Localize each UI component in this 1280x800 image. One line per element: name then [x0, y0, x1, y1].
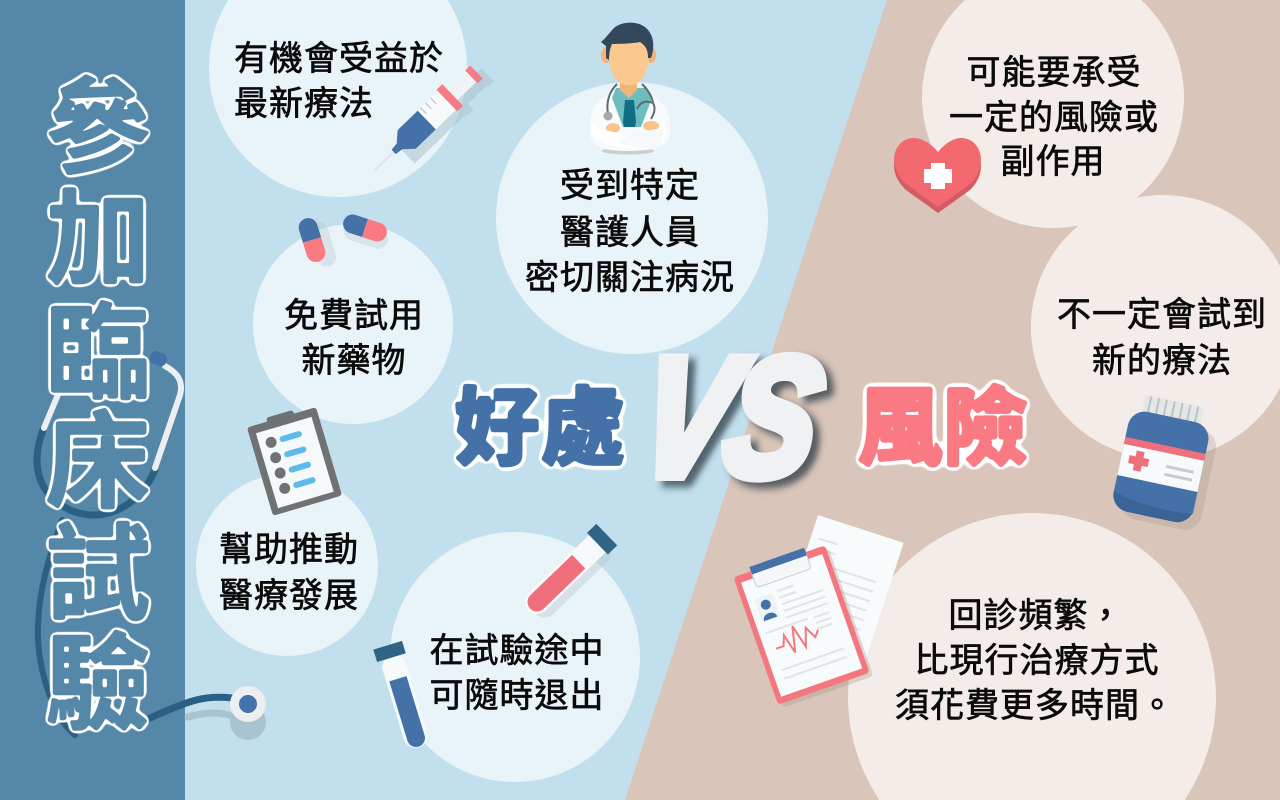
icon: medicine bottle: [1109, 393, 1224, 533]
title character 4: 床: [45, 405, 151, 522]
panel: risk 3: [848, 513, 1216, 800]
icon: medical report: [732, 515, 904, 709]
benefit 5 text: 可隨時退出: [430, 677, 604, 715]
heading: VS: [628, 324, 839, 517]
risk 3 text: 比現行治療方式: [914, 642, 1160, 680]
heading: benefits: 好處: [454, 381, 626, 477]
panel: risk 1: [922, 0, 1184, 228]
icon: checklist clipboard: [246, 403, 342, 516]
panel: benefit 5: [390, 532, 640, 782]
report back page: [778, 515, 904, 666]
icon: red test tube: [518, 524, 621, 625]
icon: syringe: [365, 57, 498, 188]
benefit 2 text: 密切關注病況: [525, 259, 735, 297]
title character 2: 加: [45, 182, 151, 299]
risk 1 text: 可能要承受: [966, 54, 1142, 92]
panel: title band: [0, 0, 185, 800]
icon: doctor: [590, 23, 670, 154]
title character 3: 臨: [45, 296, 151, 413]
title: [45, 71, 151, 744]
title character 1: 參: [45, 71, 151, 188]
panel: benefit 3: [253, 224, 453, 424]
VS shadow: VS: [635, 330, 839, 517]
benefit 4 text: 幫助推動: [219, 531, 359, 569]
report clipboard: [732, 540, 873, 709]
benefit 1 text: 最新療法: [234, 85, 374, 123]
benefit 3 text: 免費試用: [284, 297, 424, 335]
title character 5: 試: [45, 517, 151, 634]
risk 2 text: 不一定會試到: [1057, 296, 1267, 334]
panel: benefit 1: [209, 0, 467, 197]
panel: benefit 2: [496, 82, 768, 354]
VS letters: VS: [628, 324, 832, 511]
risk 1 text: 一定的風險或: [949, 99, 1159, 137]
risk 2 text: 新的療法: [1092, 342, 1232, 380]
panel: benefit 4: [196, 474, 378, 656]
benefit 5 text: 在試驗途中: [430, 632, 604, 670]
icon: capsule right: [339, 212, 393, 251]
benefit 2 text: 醫護人員: [560, 214, 700, 252]
benefit 3 text: 新藥物: [302, 342, 406, 380]
panel: risks background: [625, 0, 1280, 800]
benefit 2 text: 受到特定: [560, 167, 700, 205]
risk 3 text: 回診頻繁，: [948, 597, 1124, 635]
risk 3 text: 須花費更多時間。: [895, 687, 1175, 725]
icon: heart with cross: [894, 138, 981, 213]
heading: risks: 風險: [857, 381, 1029, 477]
icon: blue test tube: [373, 641, 433, 752]
benefit 4 text: 醫療發展: [219, 577, 359, 615]
panel: risk 2: [1031, 195, 1280, 459]
icon: capsule left: [296, 213, 338, 271]
benefit 1 text: 有機會受益於: [234, 40, 444, 78]
risk 1 text: 副作用: [1000, 143, 1106, 181]
title character 6: 驗: [45, 627, 151, 744]
icon: stethoscope: [37, 350, 266, 740]
